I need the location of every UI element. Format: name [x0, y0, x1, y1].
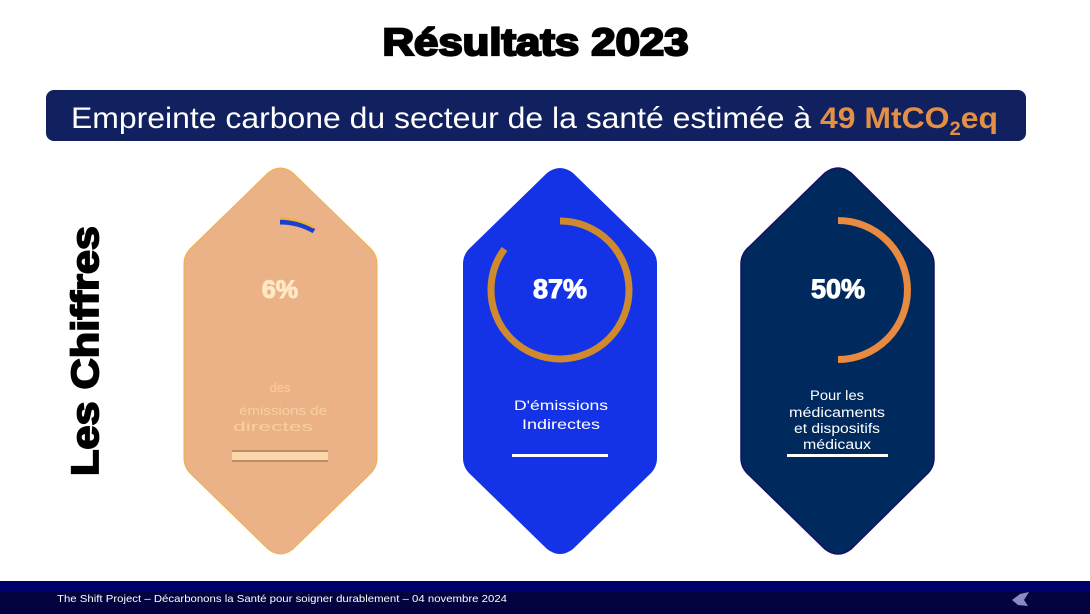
- panel shape: [463, 168, 657, 554]
- value: 6%: 6%: [262, 276, 298, 304]
- progress ring: 87%: [491, 221, 629, 359]
- label: indirect emissions: [514, 397, 608, 432]
- label: medicines and devices: et dispositifs: [794, 421, 880, 436]
- icon: logo: [1012, 592, 1029, 606]
- label: indirect emissions: Indirectes: [522, 416, 600, 432]
- banner: carbon footprint: 2: [949, 119, 961, 140]
- progress ring: 50%: [838, 220, 907, 360]
- banner: carbon footprint: eq: [961, 102, 998, 135]
- panel: 6%: [184, 168, 377, 554]
- vertical heading: Les Chiffres: Les Chiffres: [65, 226, 107, 476]
- underline: [512, 454, 608, 457]
- title: Résultats 2023: [382, 22, 688, 64]
- label: medicines and devices: Pour les: [810, 388, 864, 403]
- label: 6%: directes: [233, 419, 314, 434]
- panel shape: [741, 168, 934, 554]
- label: indirect emissions: D'émissions: [514, 397, 608, 413]
- banner: carbon footprint: Empreinte carbone du secteur de la santé estimée à 49 MtCO: [71, 102, 942, 135]
- banner: carbon footprint: [46, 90, 1026, 141]
- panel: 50%: [741, 168, 934, 554]
- value: 87%: 87%: [533, 274, 587, 304]
- panel shape: [184, 168, 377, 554]
- label: medicines and devices: médicaments: [789, 405, 885, 420]
- label: 6%: des: [270, 380, 291, 395]
- label: 6%: émissions de: [239, 403, 327, 418]
- underline: [232, 450, 328, 462]
- progress ring: 6%: [280, 218, 314, 231]
- label: medicines and devices: médicaux: [803, 437, 871, 452]
- footer text: The Shift Project – Décarbonons la Santé pour soigner durablement – 04 novembre 2024: [57, 593, 507, 605]
- panel: 87%: [463, 168, 657, 554]
- label: medicines and devices: [789, 388, 885, 452]
- footer: [0, 581, 1090, 614]
- underline: [787, 454, 888, 457]
- value: 50%: 50%: [811, 274, 865, 304]
- label: 6%: [233, 380, 327, 434]
